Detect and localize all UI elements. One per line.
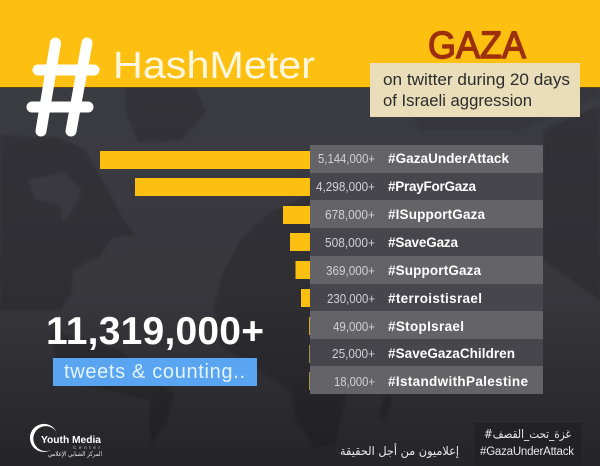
subtitle box: of Israeli aggression <box>383 91 532 110</box>
row: IstandwithPalestine <box>309 366 543 394</box>
footer slogan: إعلاميون من أجل الحقيقة <box>340 443 459 459</box>
logo: Youth Media Center: Center <box>73 445 100 450</box>
icon: hash symbol <box>32 43 94 131</box>
row: terroistisrael <box>301 284 543 311</box>
row: GazaUnderAttack <box>100 145 543 173</box>
row: SaveGaza: 508,000+ <box>325 235 375 250</box>
row: terroistisrael: #terroistisrael <box>388 291 482 306</box>
row: GazaUnderAttack: #GazaUnderAttack <box>388 151 509 166</box>
subtitle box: on twitter during 20 days <box>383 70 570 89</box>
total count: 11,319,000+ <box>46 310 264 353</box>
row: SaveGaza <box>290 228 543 256</box>
row: ISupportGaza <box>283 200 543 228</box>
footer hashtag box: #غزة_تحت_القصف <box>484 427 571 442</box>
row: IstandwithPalestine: #IstandwithPalestine <box>388 374 528 389</box>
row: SaveGazaChildren: 25,000+ <box>332 346 375 361</box>
row: SupportGaza: 369,000+ <box>326 263 375 278</box>
logo: Youth Media Center <box>30 424 102 458</box>
row: IstandwithPalestine: 18,000+ <box>334 374 375 389</box>
row: ISupportGaza: #ISupportGaza <box>388 207 485 222</box>
logo: Youth Media Center: Youth Media <box>41 434 101 446</box>
row: PrayForGaza <box>135 173 543 200</box>
row: SupportGaza: #SupportGaza <box>388 263 481 278</box>
row: ISupportGaza: 678,000+ <box>325 207 375 222</box>
row: SaveGazaChildren: #SaveGazaChildren <box>388 346 515 361</box>
row: PrayForGaza: #PrayForGaza <box>388 179 476 194</box>
row: PrayForGaza: 4,298,000+ <box>316 179 375 194</box>
bar chart: hashtag counts <box>100 145 543 394</box>
title: HashMeter: HashMeter <box>113 45 315 87</box>
callout: tweets and counting: tweets & counting.. <box>64 361 245 383</box>
row: terroistisrael: 230,000+ <box>327 291 375 306</box>
row: SaveGazaChildren <box>309 339 543 366</box>
callout: tweets and counting <box>53 358 257 386</box>
footer hashtag box <box>475 423 581 466</box>
yellow header band <box>0 0 600 87</box>
row: StopIsrael: 49,000+ <box>333 319 375 334</box>
row: GazaUnderAttack: 5,144,000+ <box>318 151 375 166</box>
subtitle box <box>370 63 580 117</box>
row: StopIsrael: #StopIsrael <box>388 319 464 334</box>
row: SaveGaza: #SaveGaza <box>388 235 458 250</box>
row: SupportGaza <box>296 256 543 284</box>
row: StopIsrael <box>309 311 543 339</box>
heading: GAZA: GAZA <box>428 25 527 67</box>
logo: Youth Media Center: المركز الشبابي الإعلامي <box>48 450 102 458</box>
footer hashtag box: #GazaUnderAttack <box>480 446 574 458</box>
